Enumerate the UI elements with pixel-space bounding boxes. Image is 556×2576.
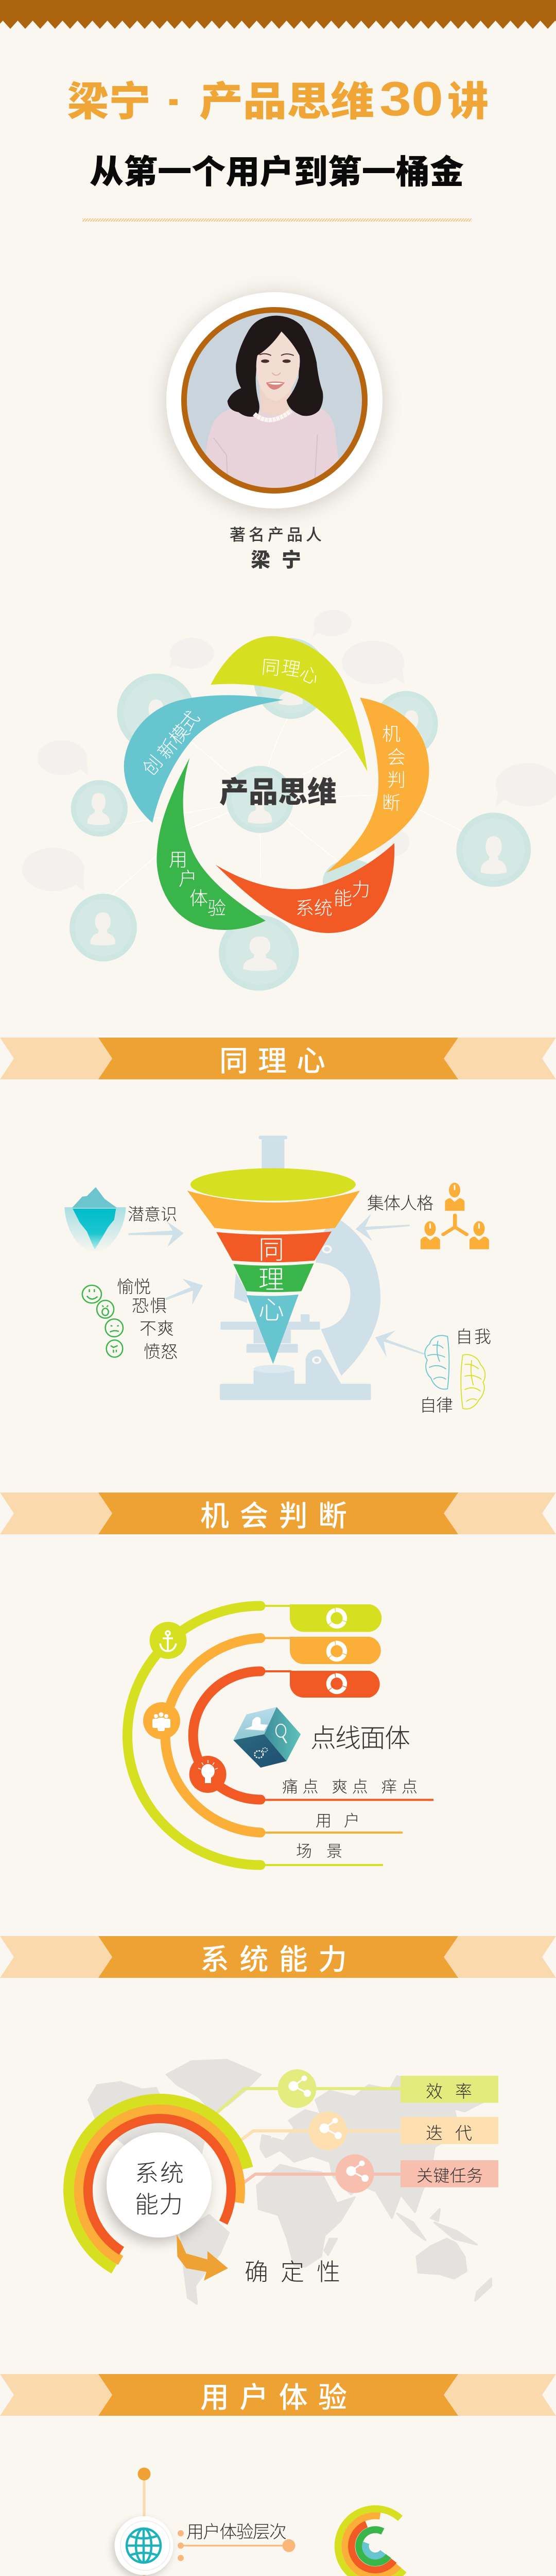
petal labels: 系 — [296, 897, 314, 919]
connector lines — [217, 2089, 402, 2191]
banner: 机会判断 — [0, 1493, 556, 1534]
funnel labels: 心 — [258, 1296, 284, 1325]
portrait of Liang Ning — [164, 292, 385, 513]
banner: 机会判断: 机会判断 — [200, 1500, 347, 1532]
author caption: 梁 宁 — [251, 550, 301, 571]
petal labels: 同 — [260, 656, 281, 679]
leader: experience levels — [178, 2530, 296, 2561]
banner: 同理心 — [0, 1038, 556, 1079]
emotion labels: 愤怒 — [144, 1342, 178, 1361]
arrow: subconscious — [128, 1221, 184, 1247]
top zigzag band — [0, 0, 556, 29]
labels: 点线面体 — [310, 1724, 410, 1753]
panel: opportunity judgement arcs — [127, 1604, 433, 1865]
arrow: to certainty — [177, 2234, 228, 2281]
petal labels: 能 — [334, 888, 352, 909]
banner: 同理心: 同理心 — [219, 1045, 325, 1077]
concentric arcs and leader lines — [127, 1606, 433, 1865]
gauge centre — [107, 2132, 212, 2238]
petal labels: 统 — [314, 897, 333, 919]
petals — [124, 636, 429, 933]
icon: iceberg — [64, 1187, 126, 1253]
arrow: collective — [356, 1214, 410, 1241]
timeline axis — [138, 2468, 150, 2576]
background people and speech bubbles — [22, 610, 556, 991]
panel: system capability — [69, 2060, 498, 2304]
petal labels: 体 — [189, 888, 208, 909]
node: experience levels — [115, 2516, 173, 2575]
petal labels: 会 — [387, 747, 406, 768]
label: certainty: 确定性 — [245, 2259, 340, 2285]
banner: 系统能力: 系统能力 — [200, 1943, 347, 1976]
icon: anchor node — [149, 1622, 186, 1659]
banner: 用户体验 — [0, 2374, 556, 2416]
item: key tasks — [336, 2155, 498, 2193]
emotion labels: 愉悦 — [117, 1277, 151, 1296]
label: subconscious: 潜意识 — [128, 1205, 177, 1224]
icon: bulb node — [189, 1756, 227, 1793]
item: iteration: 迭代 — [426, 2124, 472, 2143]
item: efficiency — [278, 2069, 498, 2108]
microscope backdrop — [220, 1136, 380, 1400]
title — [67, 72, 489, 126]
emotion labels — [117, 1277, 178, 1361]
gauge centre: 能力 — [135, 2191, 183, 2218]
pills with petal icons — [290, 1604, 381, 1698]
product thinking petal wheel — [22, 610, 556, 991]
item: efficiency: 效率 — [426, 2082, 472, 2101]
petal labels: 式 — [176, 707, 204, 735]
petal labels: 机 — [382, 723, 401, 744]
banner: 用户体验: 用户体验 — [200, 2381, 347, 2414]
panel: empathy funnel — [64, 1136, 491, 1415]
petal labels — [138, 656, 406, 919]
funnel labels: 理 — [258, 1265, 284, 1294]
petal labels: 新 — [153, 735, 182, 763]
emotion labels: 恐惧 — [132, 1296, 167, 1315]
petal labels: 模 — [165, 721, 194, 749]
petal labels: 创 — [138, 752, 167, 779]
labels: 用 户 — [316, 1812, 360, 1830]
label: collective personality: 集体人格 — [367, 1194, 433, 1213]
gauge centre: 系统 — [135, 2160, 184, 2187]
chart: segmented radial — [338, 2509, 404, 2576]
labels: self and discipline — [420, 1327, 491, 1415]
panel: user experience timeline — [37, 2468, 477, 2576]
icon: people node — [143, 1702, 180, 1739]
petal labels: 验 — [207, 897, 226, 919]
petal labels: 判 — [387, 769, 406, 790]
funnel labels: 同 — [258, 1235, 284, 1264]
labels — [282, 1724, 418, 1860]
labels: self and discipline: 自律 — [420, 1396, 453, 1415]
labels: 场 景 — [296, 1842, 342, 1860]
arrow: emotions — [165, 1279, 203, 1305]
author caption — [230, 526, 322, 571]
item: key tasks: 关键任务 — [416, 2166, 483, 2185]
labels: self and discipline: 自我 — [456, 1327, 491, 1346]
arrow: self — [375, 1331, 424, 1357]
funnel labels — [258, 1235, 284, 1325]
item: iteration — [309, 2111, 498, 2150]
icon: people group — [421, 1183, 489, 1249]
title: 30 — [379, 72, 443, 126]
labels: 痛点 爽点 痒点 — [282, 1778, 418, 1796]
title: · — [165, 79, 185, 124]
funnel — [187, 1168, 360, 1364]
author caption: 著名产品人 — [230, 526, 322, 544]
emotion labels: 不爽 — [140, 1319, 174, 1338]
subtitle: 从第一个用户到第一桶金 — [90, 154, 464, 191]
wheel centre label: 产品思维 — [219, 776, 337, 809]
petal labels: 断 — [382, 792, 401, 814]
label: experience levels: 用户体验层次 — [186, 2522, 287, 2542]
petal labels: 用 — [169, 849, 187, 870]
banner: 系统能力 — [0, 1936, 556, 1978]
petal labels: 理 — [280, 656, 302, 681]
title: 产品思维 — [199, 79, 374, 124]
hatched divider — [82, 218, 472, 222]
icon: cube — [233, 1707, 301, 1768]
title: 讲 — [447, 79, 489, 124]
world map backdrop — [89, 2060, 496, 2304]
petal labels: 心 — [297, 662, 322, 689]
title: 梁宁 — [67, 79, 151, 124]
petal labels: 力 — [352, 879, 370, 900]
petal labels: 户 — [179, 868, 197, 889]
concentric ring gauge — [69, 2099, 248, 2268]
icon: brains — [425, 1335, 485, 1409]
icons: emotion faces — [82, 1285, 123, 1357]
